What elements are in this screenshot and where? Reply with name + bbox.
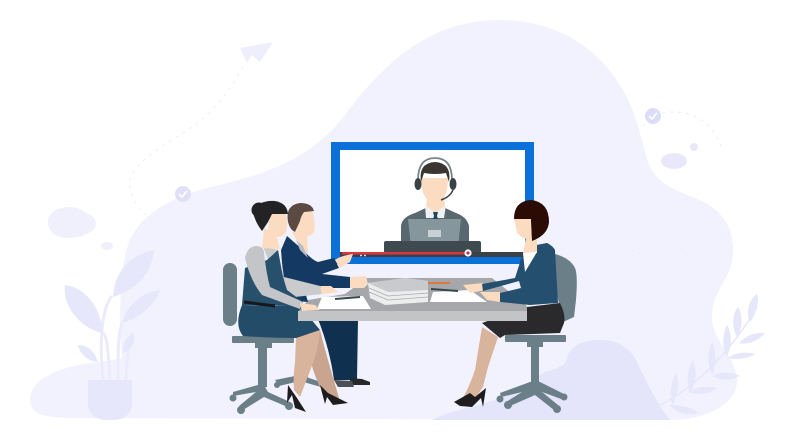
man's hair [288, 203, 314, 232]
table [298, 278, 527, 321]
belt [244, 302, 275, 306]
man's table hand [350, 276, 368, 288]
man's shoes [334, 378, 370, 387]
dark pen [431, 289, 458, 291]
dashed loop right [601, 112, 722, 258]
right woman's skirt [482, 303, 564, 338]
dashed flight path [130, 67, 243, 265]
dot right [690, 143, 698, 151]
chest [263, 246, 281, 270]
hair [252, 201, 288, 231]
right woman's legs [463, 327, 498, 403]
plant [65, 250, 160, 420]
jacket [482, 243, 558, 305]
paper stack [368, 278, 428, 305]
sprig [660, 294, 765, 414]
presenter desk [384, 241, 481, 253]
hands [463, 283, 485, 293]
left woman's chair [223, 263, 294, 414]
left woman's heel one [287, 385, 306, 412]
laptop [408, 219, 461, 247]
check badge left [175, 186, 191, 202]
video control bar [340, 249, 525, 257]
lower hand [480, 292, 500, 302]
vest [242, 250, 303, 307]
right woman upper body [463, 200, 558, 305]
left woman's skirt [238, 305, 320, 338]
right woman's chair [496, 254, 577, 413]
paper plane [240, 42, 273, 63]
man seated upper body [281, 203, 368, 302]
left paper [317, 296, 371, 309]
neck [523, 238, 537, 253]
video screen [331, 142, 534, 264]
man's trousers [318, 319, 358, 380]
hill [432, 340, 670, 420]
left woman's front leg [294, 330, 320, 397]
orange pencil [428, 282, 450, 284]
neck [262, 228, 280, 249]
right woman's heels [454, 388, 486, 407]
man's neck [292, 232, 308, 254]
man's jacket [281, 236, 350, 302]
left pen [335, 297, 360, 299]
man's collar [296, 240, 308, 258]
near arm sleeve [245, 246, 303, 309]
cloud left [48, 207, 96, 238]
blouse [523, 252, 537, 272]
check badge right [645, 108, 661, 124]
left woman's heel two [320, 385, 348, 405]
small cloud left [101, 242, 113, 250]
man's raised hand [335, 254, 353, 268]
face [268, 212, 287, 237]
cloud right [661, 153, 687, 169]
far arm [280, 250, 322, 298]
hair [514, 200, 549, 241]
far hand [320, 286, 338, 294]
right paper [430, 290, 487, 302]
face [514, 218, 532, 240]
man's face [296, 210, 315, 236]
man's chair [274, 330, 330, 389]
left woman upper body [242, 201, 338, 311]
near hand [300, 303, 320, 311]
presenter [401, 158, 469, 250]
left woman's rear leg [310, 330, 339, 398]
